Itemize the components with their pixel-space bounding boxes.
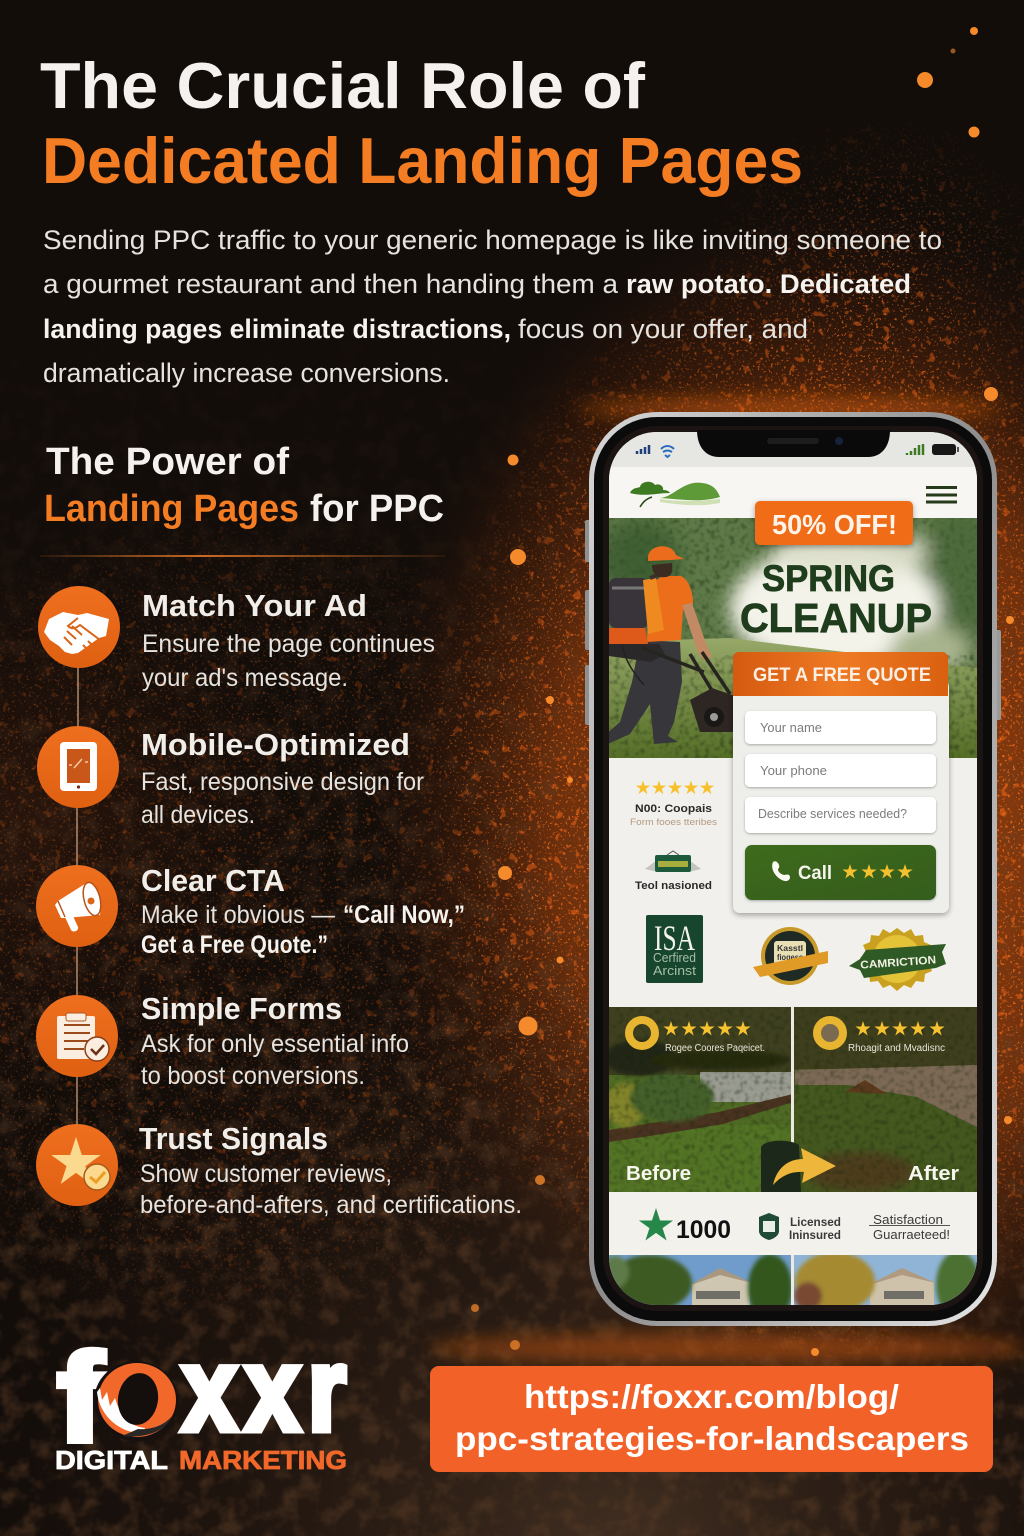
- item: simple forms: Simple Forms: [141, 991, 342, 1026]
- notch: [697, 430, 890, 457]
- trust bar: Ininsured: [789, 1228, 841, 1242]
- item: clear cta: [36, 863, 465, 959]
- before photo: [604, 1007, 793, 1192]
- after photo: [793, 1007, 977, 1192]
- icon: megaphone: [36, 865, 118, 947]
- call button: [745, 845, 936, 900]
- url button: https://foxxr.com/blog/: [524, 1378, 899, 1415]
- gold seal: [849, 928, 946, 991]
- section heading: for PPC: [310, 488, 444, 530]
- intro paragraph: dramatically increase conversions.: [43, 358, 450, 388]
- url button: ppc-strategies-for-landscapers: [455, 1420, 969, 1457]
- review summary: Form fooes tteribes: [630, 817, 717, 828]
- item: match your ad: [38, 586, 435, 692]
- house photos: [601, 1251, 980, 1322]
- item: match your ad: Ensure the page continues: [142, 630, 435, 658]
- intro paragraph: a gourmet restaurant and then handing them a: [43, 269, 619, 299]
- logo: foxxr digital marketing: x: [182, 1324, 237, 1456]
- ISA badge: Arcinst: [653, 963, 696, 978]
- section heading: [44, 441, 444, 530]
- form header: [733, 652, 948, 696]
- right rating: [817, 1020, 945, 1054]
- item: simple forms: [36, 991, 409, 1090]
- field: your name: [745, 711, 936, 744]
- call button: Call: [798, 863, 832, 884]
- form header: GET A FREE QUOTE: [753, 664, 931, 686]
- arrow: [761, 1141, 836, 1192]
- field: your name: Your name: [760, 720, 822, 735]
- header logo: [630, 482, 720, 507]
- section heading: The Power of: [46, 441, 289, 483]
- small badge: [635, 851, 712, 892]
- item: clear cta: “Call Now,”: [343, 901, 465, 929]
- logo: foxxr digital marketing: [55, 1324, 347, 1475]
- logo: foxxr digital marketing: x: [245, 1324, 300, 1456]
- hero image: [609, 518, 977, 758]
- item: trust signals: Show customer reviews,: [140, 1160, 392, 1188]
- decorative glowing sparks: [471, 27, 1014, 1356]
- item: match your ad: Match Your Ad: [142, 588, 367, 623]
- icon: tablet: [37, 726, 119, 808]
- intro paragraph: focus on your offer, and: [518, 314, 808, 344]
- url button: [430, 1366, 993, 1472]
- title: The Crucial Role of: [40, 49, 645, 122]
- item: clear cta: Clear CTA: [141, 863, 285, 898]
- before and after: Before: [626, 1163, 691, 1185]
- 50% off badge: 50% OFF!: [772, 509, 897, 540]
- small badge: Teol nasioned: [635, 880, 712, 892]
- logo letter o: fox tail: [94, 1361, 178, 1441]
- item: simple forms: Ask for only essential info: [141, 1030, 409, 1058]
- item: trust signals: Trust Signals: [139, 1121, 328, 1156]
- logo: foxxr digital marketing: DIGITAL: [55, 1445, 168, 1475]
- hamburger menu: [926, 488, 957, 502]
- field: describe services: [745, 797, 936, 833]
- logo: foxxr digital marketing: f: [57, 1327, 105, 1468]
- landscaper with mower: [604, 546, 735, 744]
- gold badge: fiogess: [777, 953, 804, 962]
- content background: [609, 758, 733, 1007]
- title: Dedicated Landing Pages: [42, 124, 803, 197]
- field: your phone: Your phone: [760, 763, 827, 778]
- trust bar: Guarraeteed!: [873, 1227, 950, 1242]
- left rating: [629, 1020, 765, 1054]
- 50% off badge: [755, 501, 913, 545]
- logo: foxxr digital marketing: MARKETING: [179, 1445, 347, 1475]
- review summary: N00: Coopais: [635, 803, 712, 815]
- icon: star with check: [36, 1124, 118, 1206]
- quote form: [733, 652, 949, 913]
- connector line: [77, 665, 78, 1128]
- ISA badge: Cerfired: [653, 950, 696, 965]
- field: your phone: [745, 754, 936, 787]
- intro paragraph: landing pages eliminate distractions,: [43, 314, 511, 344]
- intro paragraph: Sending PPC traffic to your generic homepage is like inviting someone to: [43, 225, 942, 255]
- ISA badge: [646, 915, 703, 983]
- phone frame: [585, 412, 1001, 1326]
- review summary: [630, 780, 717, 828]
- item: simple forms: to boost conversions.: [141, 1062, 365, 1090]
- hero headline: [741, 564, 931, 633]
- gold badge: [753, 927, 828, 985]
- hero headline: CLEANUP: [740, 595, 932, 641]
- field: describe services: Describe services needed?: [758, 806, 907, 821]
- item: trust signals: before-and-afters, and certifications.: [140, 1191, 522, 1219]
- ISA badge: ISA: [654, 918, 695, 958]
- trust bar: 1000: [676, 1216, 731, 1244]
- gold seal: CAMRICTION: [860, 954, 937, 972]
- item: mobile-optimized: Fast, responsive design for: [141, 768, 424, 796]
- trust bar: [639, 1208, 950, 1240]
- before and after: After: [908, 1163, 959, 1185]
- icon: clipboard: [36, 995, 118, 1077]
- item: mobile-optimized: [37, 726, 424, 829]
- logo: foxxr digital marketing: r: [308, 1324, 346, 1456]
- item: match your ad: your ad's message.: [142, 664, 348, 692]
- left rating: Rogee Coores Paqeicet.: [665, 1043, 765, 1054]
- intro paragraph: [43, 225, 942, 388]
- phone: [585, 412, 1001, 1326]
- header: [609, 467, 977, 480]
- item: clear cta: Get a Free Quote.”: [141, 931, 328, 959]
- intro paragraph: raw potato. Dedicated: [626, 269, 911, 299]
- icon: handshake: [38, 586, 120, 668]
- item: mobile-optimized: Mobile-Optimized: [141, 727, 410, 762]
- status bar: [609, 432, 977, 468]
- item: trust signals: [36, 1121, 522, 1219]
- right rating: Rhoagit and Mvadisnc: [848, 1043, 945, 1054]
- section heading: Landing Pages: [44, 488, 299, 530]
- hero headline: SPRING: [762, 558, 895, 599]
- trust bar: Satisfaction: [873, 1212, 943, 1227]
- trust bar: Licensed: [790, 1215, 841, 1229]
- phone screen: [600, 432, 1000, 1322]
- before and after: [604, 1007, 977, 1192]
- item: clear cta: Make it obvious —: [141, 901, 335, 929]
- item: mobile-optimized: all devices.: [141, 801, 255, 829]
- title: [40, 49, 803, 197]
- gold badge: Kasstl: [777, 944, 803, 953]
